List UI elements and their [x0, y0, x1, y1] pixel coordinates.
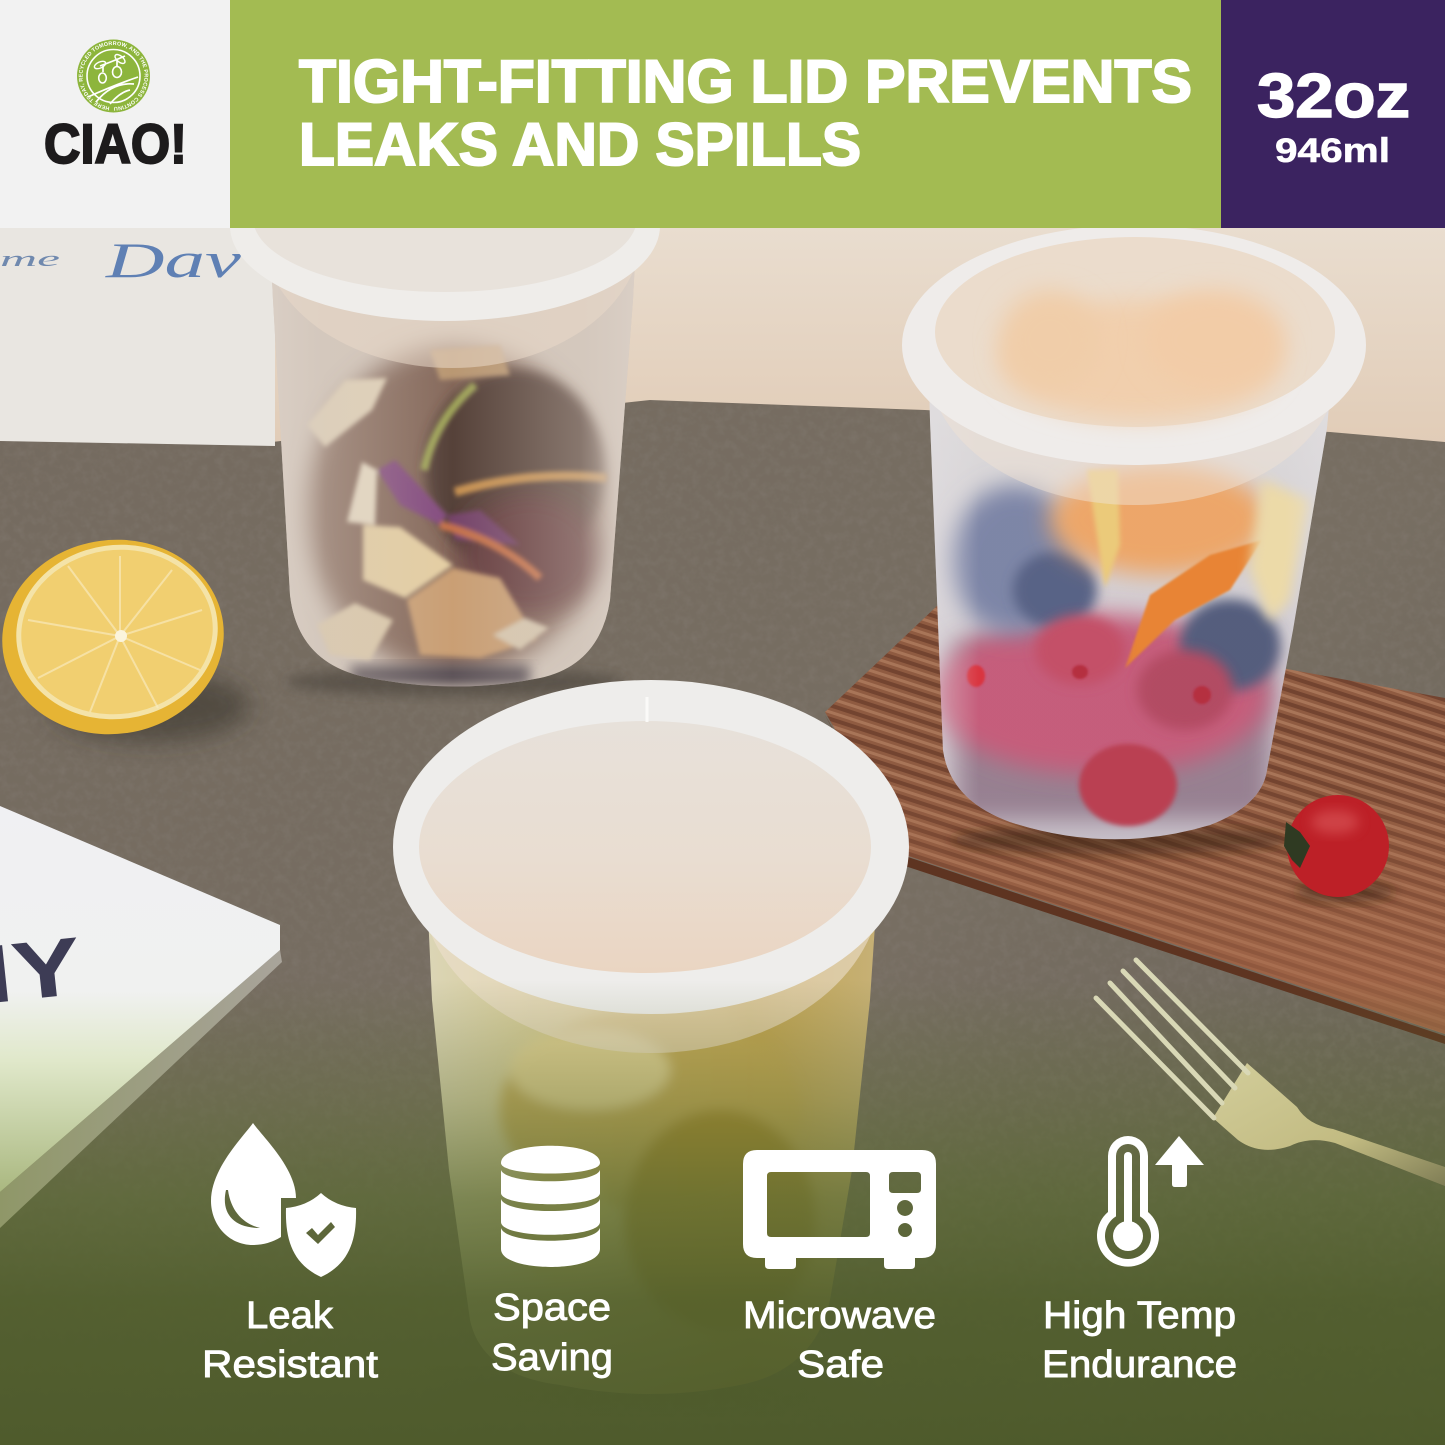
fork tines	[1096, 960, 1248, 1118]
headline: TIGHT-FITTING LID PREVENTS	[299, 48, 1192, 115]
logo wordmark: CIAO!	[44, 112, 187, 175]
header: headline band	[230, 0, 1221, 228]
label	[202, 1295, 378, 1386]
label	[1042, 1295, 1237, 1386]
label: Microwave	[743, 1295, 936, 1337]
left container contents	[272, 271, 634, 686]
feature: leak resistant	[202, 1123, 378, 1386]
label: Space	[493, 1287, 611, 1329]
capacity oz: 32oz	[1257, 62, 1410, 131]
fork	[1096, 960, 1445, 1186]
header: logo panel	[0, 0, 230, 228]
icon: stacked discs	[501, 1146, 600, 1267]
label: Endurance	[1042, 1344, 1237, 1386]
label: High Temp	[1043, 1295, 1236, 1337]
pasta inside	[496, 1014, 811, 1274]
fruit in right container	[930, 402, 1328, 840]
front lid rim	[393, 680, 909, 1014]
handwritten paper	[0, 228, 275, 446]
header: size badge	[1221, 0, 1445, 228]
fork head and handle	[1213, 1063, 1445, 1186]
wooden cutting board	[825, 605, 1445, 1044]
handwritten paper: Dav	[104, 232, 242, 288]
headline	[299, 48, 1192, 178]
logo seal	[77, 40, 150, 112]
icon: microwave	[743, 1150, 936, 1269]
label	[743, 1295, 936, 1386]
label: Saving	[491, 1337, 613, 1379]
label	[491, 1287, 613, 1379]
front container	[393, 680, 909, 1410]
back left container	[230, 228, 660, 700]
headline: LEAKS AND SPILLS	[299, 111, 861, 178]
handwritten paper: me	[0, 246, 61, 271]
notebook	[0, 806, 282, 1228]
right lid	[902, 225, 1366, 465]
lid rim marks	[646, 697, 648, 722]
front lid centre	[419, 721, 871, 973]
icon: water drop with shield	[211, 1123, 356, 1277]
label: Safe	[797, 1344, 884, 1386]
green gradient overlay	[0, 980, 1445, 1445]
back right container	[902, 225, 1366, 855]
back wall	[240, 228, 1445, 445]
capacity ml: 946ml	[1275, 132, 1390, 170]
label: Leak	[246, 1295, 334, 1337]
feature: space saving	[491, 1146, 613, 1379]
lemon slice	[0, 525, 250, 749]
icon: thermometer with up arrow	[1097, 1136, 1204, 1267]
feature: microwave safe	[743, 1150, 936, 1386]
label: Resistant	[202, 1344, 378, 1386]
left lid	[230, 131, 660, 321]
tomato	[1284, 795, 1395, 902]
front container body	[428, 930, 875, 1345]
feature: high temp endurance	[1042, 1136, 1237, 1386]
